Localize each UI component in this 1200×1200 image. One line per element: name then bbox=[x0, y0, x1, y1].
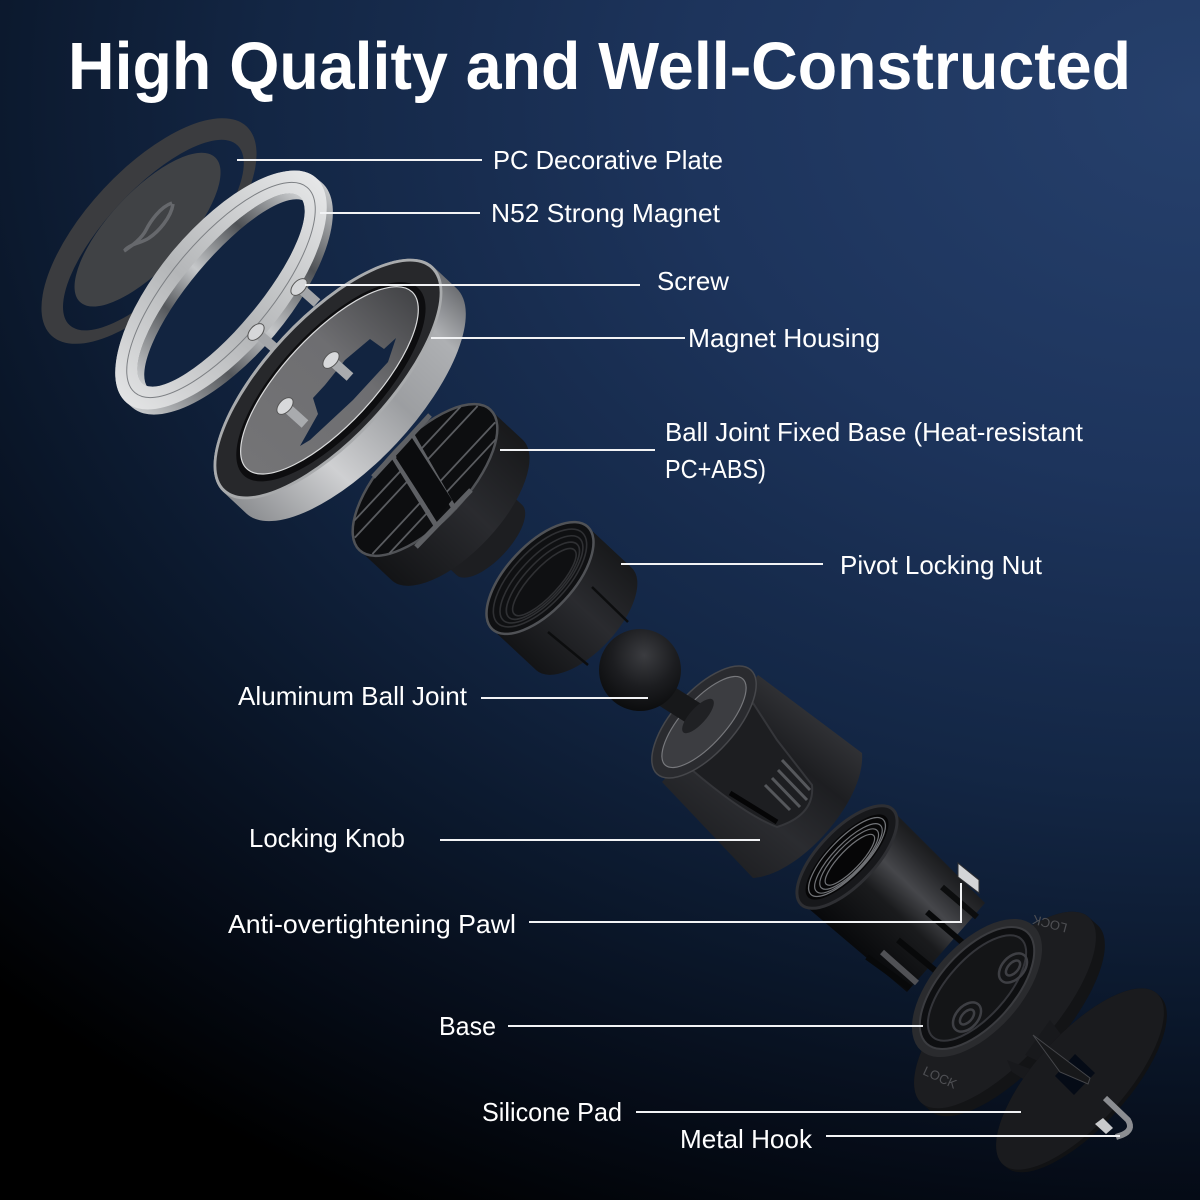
label: PC Decorative Plate: PC Decorative Plate bbox=[493, 145, 723, 175]
part: metal hook bbox=[1033, 1035, 1130, 1137]
label: Metal Hook: Metal Hook bbox=[680, 1124, 813, 1154]
part: base bbox=[886, 885, 1133, 1143]
part: ball joint fixed base bbox=[329, 381, 569, 624]
label: Ball Joint Fixed Base: PC+ABS) bbox=[665, 454, 766, 484]
plate logo bbox=[124, 203, 173, 251]
base screw bosses bbox=[947, 948, 1033, 1037]
label: Screw: Screw bbox=[657, 266, 729, 296]
part: N52 strong magnet ring bbox=[115, 170, 333, 415]
label: Ball Joint Fixed Base bbox=[665, 417, 1084, 484]
label: Ball Joint Fixed Base: Ball Joint Fixed Base (Heat-resistant bbox=[665, 417, 1084, 447]
collar teeth bbox=[867, 887, 977, 988]
part: magnet housing bbox=[178, 224, 502, 556]
label: Anti-overtightening Pawl: Anti-overtightening Pawl bbox=[228, 909, 516, 939]
base mounting tabs bbox=[1007, 1020, 1063, 1082]
housing screws bbox=[274, 349, 350, 424]
label: Locking Knob: Locking Knob bbox=[249, 823, 405, 853]
label: Base: Base bbox=[439, 1011, 496, 1041]
label: Silicone Pad: Silicone Pad bbox=[482, 1097, 622, 1127]
part: screws bbox=[245, 276, 317, 350]
part: pivot locking nut bbox=[468, 504, 656, 693]
label: Magnet Housing: Magnet Housing bbox=[688, 323, 880, 353]
pawl tab bbox=[958, 863, 979, 893]
part: anti-overtightening pawl collar bbox=[781, 790, 985, 992]
base engraved LOCK marks: LOCK bbox=[921, 1063, 959, 1092]
label: Aluminum Ball Joint: Aluminum Ball Joint bbox=[238, 681, 468, 711]
part: PC decorative plate bbox=[6, 84, 292, 378]
part: locking knob bbox=[634, 649, 862, 878]
base engraved LOCK marks bbox=[921, 912, 1069, 1092]
label: N52 Strong Magnet: N52 Strong Magnet bbox=[491, 198, 721, 228]
callout lines bbox=[237, 160, 1120, 1136]
base engraved LOCK marks: LOCK bbox=[1030, 912, 1069, 936]
part: aluminum ball joint bbox=[599, 629, 719, 738]
title: High Quality and Well-Constructed bbox=[68, 29, 1131, 104]
label: Pivot Locking Nut: Pivot Locking Nut bbox=[840, 550, 1043, 580]
housing cut-out bbox=[300, 338, 396, 446]
part: silicone pad bbox=[970, 963, 1193, 1197]
